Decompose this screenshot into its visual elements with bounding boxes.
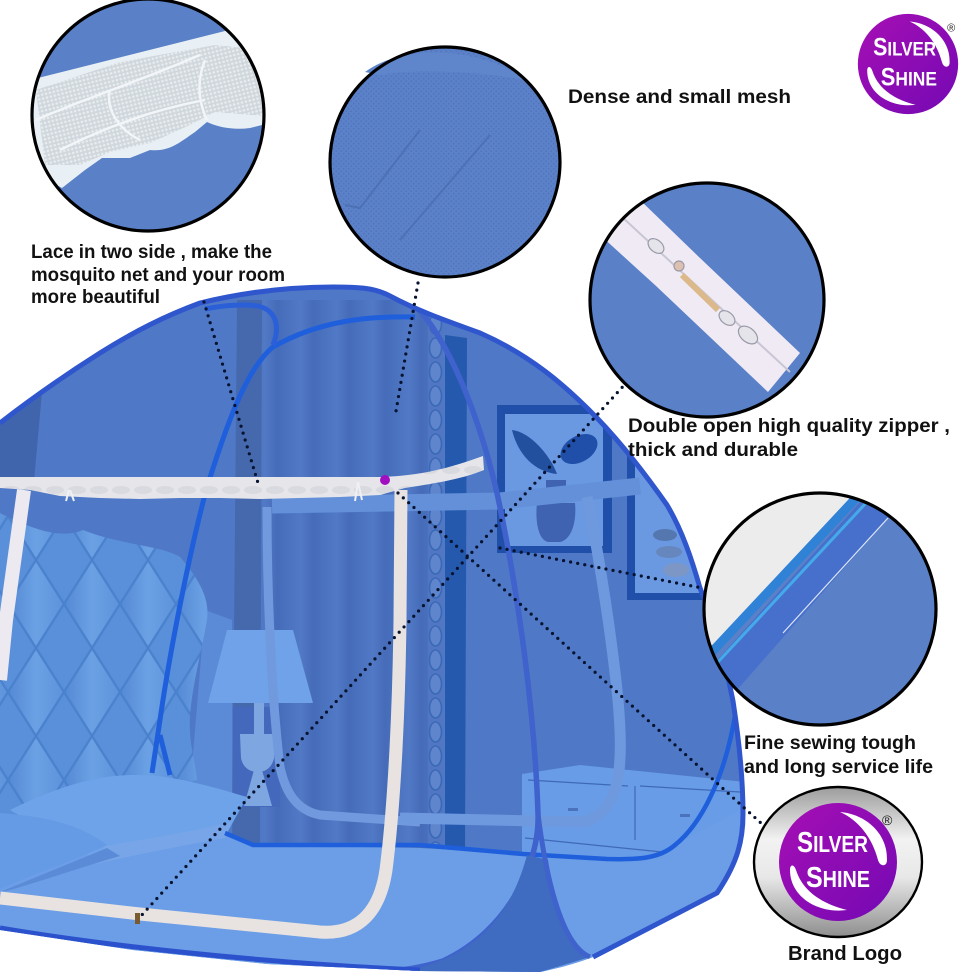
mesh detail circle (330, 47, 560, 277)
back blue frame (225, 710, 736, 859)
heading: mesh: Dense and small mesh (568, 87, 791, 108)
lace trim (0, 456, 484, 499)
sewing detail circle (700, 480, 936, 725)
brand logo badge: ® (882, 812, 893, 828)
zipper pull amber (682, 275, 718, 310)
dotted leader: lace (204, 302, 258, 483)
mosquito net tent photo (0, 280, 760, 972)
brand logo badge: SHINE (806, 862, 870, 894)
inner blue arc (152, 317, 415, 775)
faded door strip right (400, 497, 620, 822)
brand logo badge (754, 787, 922, 937)
heading: sewing: Fine sewing tough (744, 733, 916, 754)
stitch line (783, 518, 888, 633)
top hook arc (205, 305, 277, 345)
cyan binding edge (718, 503, 866, 662)
zipper tab (135, 913, 140, 924)
heading: zipper: Double open high quality zipper , (628, 416, 950, 437)
faded lace back (272, 486, 640, 505)
white door frame (0, 490, 401, 932)
blue binding edge (710, 497, 857, 654)
heading: lace: more beautiful (31, 287, 160, 308)
right front arc (380, 303, 538, 972)
tent floor fold (400, 855, 590, 972)
picture frame one (497, 405, 612, 553)
lace motifs (36, 45, 265, 165)
zipper sliders (645, 236, 761, 347)
tent outline (0, 287, 743, 957)
heading: zipper: thick and durable (628, 440, 798, 461)
dotted leader: sewing (500, 548, 702, 588)
top right Silver Shine logo: SILVER (873, 35, 936, 62)
bed sheet (0, 836, 733, 972)
back pillow (10, 775, 247, 842)
heading: lace: Lace in two side , make the (31, 242, 272, 263)
lace highlight threads (36, 55, 207, 150)
brand logo caption: Brand Logo (788, 943, 902, 965)
heading: sewing: and long service life (744, 757, 933, 778)
cabinet (522, 765, 740, 857)
zipper detail circle (590, 183, 824, 417)
headboard (0, 513, 208, 830)
heading: lace: mosquito net and your room (31, 265, 285, 286)
bedside lamp (208, 630, 313, 807)
zipper teeth line (622, 217, 790, 372)
dark curtain panel (232, 300, 262, 850)
pillow shadow (0, 848, 120, 892)
wall corner shade (0, 392, 42, 482)
top right Silver Shine logo (858, 14, 958, 114)
side panel beside headboard (190, 610, 232, 800)
top right Silver Shine logo: ® (947, 23, 955, 35)
top right Silver Shine logo: SHINE (881, 64, 937, 91)
patterned wall strip (428, 318, 443, 848)
faded door strip left (267, 507, 420, 822)
dotted leader: zipper (140, 382, 627, 917)
small logo tag (380, 475, 390, 485)
dark wall strip (445, 335, 467, 850)
front pillow (0, 813, 106, 854)
dotted leader: brand logo (398, 493, 762, 824)
right lobe arc (538, 814, 590, 957)
tent back wall (0, 280, 760, 972)
lace detail circle (30, 0, 270, 231)
lace band (30, 25, 270, 188)
dotted leader: mesh (395, 283, 418, 417)
bedroom curtain (262, 300, 430, 850)
picture frame two (627, 456, 702, 600)
white room area (700, 480, 850, 670)
back pillow underside (95, 822, 232, 864)
bottom hem (0, 928, 420, 970)
brand logo badge: SILVER (797, 827, 868, 859)
bows on lace (66, 482, 362, 501)
dark binding band (710, 500, 895, 690)
zipper tape (600, 200, 800, 392)
